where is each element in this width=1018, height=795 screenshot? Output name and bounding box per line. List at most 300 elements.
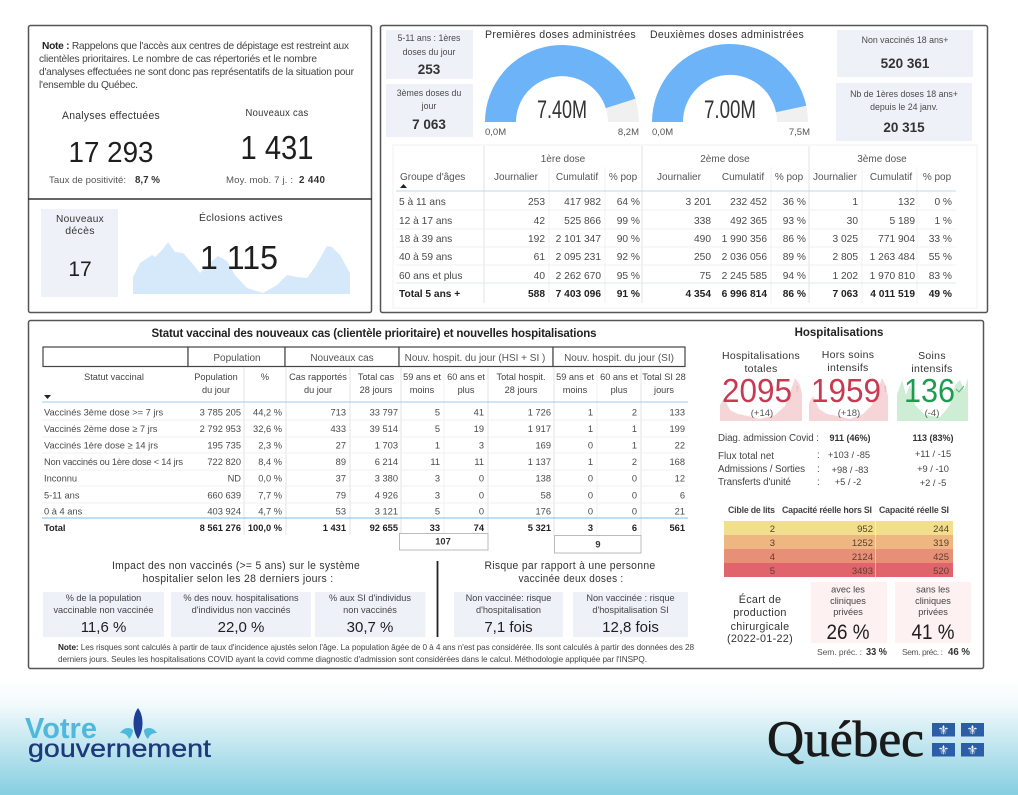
table rows: 338 — [694, 216, 711, 227]
gauge: deuxiemes doses: 7,5M — [789, 127, 810, 138]
table rows: 1 — [852, 197, 858, 208]
kpi: hors soins intensifs: ! — [884, 385, 886, 394]
kpi: hors soins intensifs: 1959 — [811, 372, 881, 409]
kpi: nouveaux deces: décès — [65, 225, 95, 237]
kpi: analyses effectuees — [49, 110, 160, 186]
table rows: 525 866 — [564, 216, 601, 227]
table rows: Inconnu — [44, 474, 77, 484]
footnote — [58, 643, 694, 664]
column headers: Total hospit. — [496, 372, 546, 382]
kpi: 1eres doses depuis 24 janv: depuis le 24 janv. — [870, 102, 938, 112]
gauge: deuxiemes doses: 7.00M — [704, 96, 756, 124]
kpi: avec les cliniques privees: Sem. préc. : — [817, 647, 862, 657]
column headers: Total cas — [358, 372, 395, 382]
column headers: plus — [458, 385, 475, 395]
table rows: 1 — [632, 424, 637, 434]
table rows: 490 — [694, 234, 711, 245]
logo: votre gouvernement — [25, 708, 211, 763]
table rows: 36 % — [783, 197, 806, 208]
table rows: 61 — [534, 252, 545, 263]
table rows: 253 — [528, 197, 545, 208]
kpi: sans les cliniques privees: 46 % — [948, 647, 970, 658]
logo: votre gouvernement: gouvernement — [28, 735, 211, 763]
table rows: 722 820 — [207, 457, 241, 467]
table rows: 192 — [528, 234, 545, 245]
hospital flow details: 911 (46%) — [829, 433, 871, 443]
gauge: premieres doses: 0,0M — [485, 127, 506, 138]
table rows: 32,6 % — [253, 424, 282, 434]
hospital flow details: : — [817, 464, 820, 475]
hospital flow details: +2 / -5 — [920, 478, 946, 488]
kpi: soins intensifs — [897, 350, 968, 421]
kpi: hors soins intensifs — [809, 349, 888, 421]
note text: clientèles prioritaires. Le nombre de cas répertoriés et le nombre — [39, 54, 317, 65]
table group headers — [43, 347, 685, 366]
table rows: 1 — [588, 457, 593, 467]
kpi: 5-11 ans: 253 — [418, 62, 441, 77]
gauge: premieres doses: 7.40M — [537, 96, 587, 124]
kpi: analyses effectuees: 17 293 — [68, 137, 154, 169]
heading: ecart de production chirurgicale — [727, 593, 793, 645]
kpi: population non vaccinee — [43, 592, 164, 637]
section: impact des non vaccines: hospitalier selon les 28 derniers jours : — [142, 573, 334, 585]
table rows: 1 202 — [832, 271, 858, 282]
table rows: 403 924 — [207, 506, 241, 516]
table rows: 2 792 953 — [200, 424, 241, 434]
hospital flow details: +5 / -2 — [835, 477, 861, 487]
hospital flow details: Flux total net — [718, 451, 774, 462]
table: bed capacity: Cible de lits — [728, 505, 775, 515]
hospital flow details: : — [817, 477, 820, 488]
table rows: 22 — [675, 440, 685, 450]
column headers: 59 ans et — [403, 372, 441, 382]
table rows: 2,3 % — [258, 440, 282, 450]
table rows: 42 — [534, 216, 545, 227]
table rows: 91 % — [617, 289, 640, 300]
table header: Journalier — [813, 172, 858, 183]
column headers: Cas rapportés — [289, 372, 347, 382]
table rows — [44, 408, 685, 533]
table rows: 5 189 — [890, 216, 915, 227]
table rows: 6 996 814 — [722, 289, 767, 300]
table rows: 0 — [479, 506, 484, 516]
column headers: % — [261, 372, 269, 382]
kpi: population non vaccinee: 11,6 % — [81, 619, 126, 636]
column headers: du jour — [304, 385, 332, 395]
table rows: 58 — [541, 490, 551, 500]
kpi: soins intensifs: (-4) — [925, 408, 939, 419]
heading: statut vaccinal: Statut vaccinal des nouveaux cas (clientèle prioritaire) et nouvelles hospitalisations — [152, 328, 596, 340]
table header: Journalier — [494, 172, 539, 183]
table rows: 1 431 — [323, 523, 346, 533]
table header: 2ème dose — [700, 154, 750, 165]
kpi: avec les cliniques privees: cliniques — [830, 596, 866, 606]
kpi: nouveaux deces: 17 — [68, 258, 92, 281]
gauge: premieres doses: 8,2M — [618, 127, 639, 138]
kpi: population non vaccinee: vaccinable non vaccinée — [53, 605, 154, 615]
table group headers: Nouv. hospit. du jour (HSI + SI ) — [405, 353, 545, 364]
icon: quebec flag: ⚜ — [967, 744, 978, 758]
table header: Cumulatif — [556, 172, 598, 183]
table rows: ND — [228, 474, 241, 484]
table: bed capacity: 2124 — [852, 552, 873, 563]
table header: % pop — [923, 172, 952, 183]
icon: quebec flag: ⚜ — [938, 744, 949, 758]
table rows: 4 354 — [686, 289, 711, 300]
table group headers: Population — [213, 353, 261, 364]
kpi: hors soins intensifs: Hors soins — [822, 349, 874, 361]
table rows: 1 — [588, 424, 593, 434]
table rows: 7 403 096 — [556, 289, 601, 300]
table rows: 11 — [430, 457, 440, 467]
table rows: 6 214 — [375, 457, 398, 467]
column headers: Population — [194, 372, 238, 382]
kpi: eclosions actives — [133, 211, 350, 294]
table rows: 8 561 276 — [200, 523, 241, 533]
kpi: hospitalisations non vaccines — [171, 592, 311, 637]
table rows: 588 — [528, 289, 545, 300]
kpi: 1eres doses depuis 24 janv: 20 315 — [883, 120, 925, 135]
table: doses by age group — [393, 145, 977, 308]
table rows: Total 5 ans + — [399, 289, 460, 300]
kpi: soins intensifs: intensifs — [911, 363, 953, 375]
table rows: 12 à 17 ans — [399, 216, 452, 227]
table rows: 89 — [336, 457, 346, 467]
section: risque — [454, 560, 688, 637]
hospital flow details: +103 / -85 — [828, 450, 870, 460]
table rows: Vaccinés 2ème dose ≥ 7 jrs — [44, 424, 158, 434]
footer background — [0, 680, 1018, 795]
kpi: hors soins intensifs: intensifs — [827, 362, 869, 374]
kpi: hospitalisations totales: totales — [744, 363, 778, 375]
kpi: nouveaux cas: 1 431 — [240, 129, 314, 166]
kpi: hors soins intensifs: (+18) — [838, 408, 860, 419]
footnote: derniers jours. Seules les hospitalisations COVID ayant la covid comme diagnostic d'admission sont considérées dans le calcul. Méthodologie appliquée par l'INSPQ. — [58, 655, 647, 664]
table rows: 7 063 — [832, 289, 858, 300]
table: bed capacity: Capacité réelle SI — [879, 505, 949, 515]
table header: 1ère dose — [541, 154, 586, 165]
kpi: analyses effectuees: 8,7 % — [135, 175, 160, 186]
kpi: eclosions actives: 1 115 — [200, 239, 278, 276]
panel: tests and cases — [28, 26, 372, 312]
kpi: risque hospitalisation: Non vaccinée: risque — [466, 593, 551, 603]
table rows: 33 — [430, 523, 440, 533]
table rows: 250 — [694, 252, 711, 263]
table rows: 11 — [474, 457, 484, 467]
kpi: risque SI: d'hospitalisation SI — [592, 605, 669, 615]
table rows: 5-11 ans — [44, 490, 80, 500]
table header: % pop — [609, 172, 638, 183]
table rows: 5 à 11 ans — [399, 197, 446, 208]
table rows: 3 — [479, 440, 484, 450]
table rows: 3 121 — [375, 506, 398, 516]
kpi: nouveaux cas — [226, 107, 326, 186]
kpi: 5-11 ans: 5-11 ans : 1ères — [398, 33, 461, 43]
column headers: Total SI 28 — [642, 372, 686, 382]
table rows: 2 095 231 — [556, 252, 601, 263]
heading: ecart de production chirurgicale: chirurgicale — [731, 621, 789, 633]
table rows: 4 011 519 — [870, 289, 915, 300]
table rows: 5 — [435, 408, 440, 418]
table rows: 2 262 670 — [556, 271, 601, 282]
table rows: 3 — [588, 523, 593, 533]
column headers: 60 ans et — [447, 372, 485, 382]
subtotal box: 9: 9 — [595, 540, 601, 550]
kpi: risque SI: Non vaccinée : risque — [586, 593, 675, 603]
table rows: 8,4 % — [258, 457, 282, 467]
table: bed capacity: 952 — [857, 524, 873, 535]
note text: l'ensemble du Québec. — [39, 80, 138, 91]
kpi: avec les cliniques privees — [811, 582, 887, 658]
table rows: 4 926 — [375, 490, 398, 500]
section: risque: Risque par rapport à une personne — [484, 560, 656, 572]
table rows: 0 — [588, 440, 593, 450]
kpi: avec les cliniques privees: 26 % — [826, 621, 870, 644]
table rows: 0 % — [934, 197, 952, 208]
table rows: 44,2 % — [253, 408, 282, 418]
table rows: 1 — [632, 440, 637, 450]
section: hospitalisations: Hospitalisations — [795, 327, 883, 339]
table rows: 5 — [435, 506, 440, 516]
note text — [39, 41, 355, 91]
table rows: 1 970 810 — [870, 271, 915, 282]
kpi: avec les cliniques privees: 33 % — [866, 647, 887, 658]
table rows: 3 — [435, 474, 440, 484]
icon: quebec flag — [932, 723, 984, 758]
table rows: 2 805 — [832, 252, 858, 263]
table rows: 2 245 585 — [722, 271, 767, 282]
table rows: 1 990 356 — [722, 234, 767, 245]
kpi: hospitalisations totales: (+14) — [751, 408, 773, 419]
table rows: 0 à 4 ans — [44, 506, 83, 516]
kpi: risque SI: 12,8 fois — [602, 619, 659, 636]
kpi: SI non vaccines: 30,7 % — [347, 619, 393, 636]
table rows: 168 — [669, 457, 685, 467]
table rows: 2 036 056 — [722, 252, 767, 263]
table header: 3ème dose — [857, 154, 907, 165]
table rows: 169 — [535, 440, 551, 450]
hospital flow details: +98 / -83 — [832, 465, 868, 475]
section: impact des non vaccines: Impact des non vaccinés (>= 5 ans) sur le système — [112, 560, 360, 572]
table rows: 33 % — [929, 234, 952, 245]
kpi: sans les cliniques privees: 41 % — [912, 621, 954, 644]
table rows: 1 — [435, 440, 440, 450]
section: risque: vaccinée deux doses : — [518, 573, 624, 585]
kpi: sans les cliniques privees — [895, 582, 971, 658]
kpi: 3emes doses: jour — [421, 101, 436, 111]
kpi: risque hospitalisation — [454, 592, 563, 637]
kpi: hospitalisations non vaccines: % des nouv. hospitalisations — [183, 593, 299, 603]
kpi: non vaccines 18 ans+: Non vaccinés 18 ans+ — [862, 35, 948, 45]
table rows: 1 263 484 — [870, 252, 915, 263]
kpi: nouveaux cas: Nouveaux cas — [246, 107, 308, 119]
table rows: 49 % — [929, 289, 952, 300]
table rows — [399, 197, 952, 300]
kpi: risque hospitalisation: 7,1 fois — [484, 619, 533, 636]
table rows: 3 025 — [832, 234, 858, 245]
table rows: 0 — [632, 474, 637, 484]
kpi: risque hospitalisation: d'hospitalisation — [476, 605, 541, 615]
table rows: 93 % — [783, 216, 806, 227]
column headers: Statut vaccinal — [84, 372, 144, 382]
table rows: 1 703 — [375, 440, 398, 450]
footnote: Note: Les risques sont calculés à partir de taux d'incidence ajustés selon l'âge. La population âgée de 0 à 4 ans n'est pas considérée. Ils sont calculés à partir des données des 28 — [58, 643, 694, 652]
table header: Cumulatif — [722, 172, 764, 183]
table rows: 60 ans et plus — [399, 271, 462, 282]
kpi: risque SI — [573, 592, 688, 637]
column headers: 28 jours — [505, 385, 538, 395]
kpi: non vaccines 18 ans+ — [837, 30, 973, 77]
kpi: non vaccines 18 ans+: 520 361 — [881, 56, 930, 71]
hospital flow details: : — [817, 450, 820, 461]
hospital flow details — [718, 433, 954, 488]
table rows: 55 % — [929, 252, 952, 263]
table rows: 53 — [336, 506, 346, 516]
table rows: 100,0 % — [248, 523, 283, 533]
table rows: 4,7 % — [258, 506, 282, 516]
kpi: SI non vaccines — [315, 592, 426, 637]
table rows: Non vaccinés ou 1ère dose < 14 jrs — [44, 457, 183, 467]
kpi: 5-11 ans — [386, 30, 473, 79]
column headers: jours — [653, 385, 674, 395]
kpi: sans les cliniques privees: privées — [918, 607, 948, 617]
table: bed capacity: 4 — [770, 552, 775, 563]
table rows: 133 — [669, 408, 685, 418]
table rows: 6 — [632, 523, 637, 533]
table: bed capacity: Capacité réelle hors SI — [782, 505, 872, 515]
table rows: 0 — [632, 490, 637, 500]
table rows: 19 — [474, 424, 484, 434]
table: vaccination status — [42, 347, 688, 553]
table: bed capacity: 425 — [933, 552, 949, 563]
table: bed capacity: 1252 — [852, 538, 873, 549]
column headers: moins — [410, 385, 435, 395]
table rows: 30 — [847, 216, 858, 227]
column headers: 59 ans et — [556, 372, 594, 382]
table rows: 95 % — [617, 271, 640, 282]
table rows: 0,0 % — [258, 474, 282, 484]
logo: quebec: Québec — [767, 712, 924, 768]
table rows: 90 % — [617, 234, 640, 245]
table rows: 660 639 — [207, 490, 241, 500]
kpi: hospitalisations totales: 2095 — [722, 372, 792, 409]
sort arrow — [400, 184, 407, 188]
kpi: hospitalisations totales — [720, 350, 802, 421]
table rows: 417 982 — [564, 197, 601, 208]
column headers: 60 ans et — [600, 372, 638, 382]
subtotal box: 107 — [400, 534, 488, 550]
table rows: 6 — [680, 490, 685, 500]
table rows: 99 % — [617, 216, 640, 227]
hospital flow details: Admissions / Sorties — [718, 464, 805, 475]
logo: votre gouvernement: Votre — [25, 713, 97, 745]
panel: vaccination status and hospitalisations — [28, 320, 984, 668]
column headers: du jour — [202, 385, 230, 395]
table rows: 3 380 — [375, 474, 398, 484]
table rows: 176 — [535, 506, 551, 516]
table rows: 18 à 39 ans — [399, 234, 452, 245]
table rows: 92 655 — [370, 523, 398, 533]
table rows: 2 — [632, 457, 637, 467]
table header: Cumulatif — [870, 172, 912, 183]
table rows: 561 — [669, 523, 685, 533]
table rows: 33 797 — [370, 408, 398, 418]
note text: Note : Rappelons que l'accès aux centres de dépistage est restreint aux — [42, 41, 349, 52]
table header: Groupe d'âges — [400, 172, 465, 183]
table rows: 83 % — [929, 271, 952, 282]
table rows: 195 735 — [207, 440, 241, 450]
table rows: 0 — [588, 490, 593, 500]
kpi: avec les cliniques privees: privées — [833, 607, 863, 617]
kpi: eclosions actives: Éclosions actives — [199, 211, 283, 224]
table rows: 199 — [669, 424, 685, 434]
kpi: hospitalisations totales: ! — [796, 385, 798, 394]
gauge: premieres doses: Premières doses administrées — [485, 29, 636, 41]
table: bed capacity: 3493 — [852, 566, 873, 577]
table rows: 132 — [898, 197, 915, 208]
table rows: 771 904 — [878, 234, 915, 245]
kpi: hospitalisations non vaccines: 22,0 % — [218, 619, 264, 636]
column headers: 28 jours — [360, 385, 393, 395]
table rows: 27 — [336, 440, 346, 450]
column headers: moins — [563, 385, 588, 395]
gauge: deuxiemes doses — [650, 29, 810, 138]
table rows: 7,7 % — [258, 490, 282, 500]
table rows: 75 — [700, 271, 711, 282]
table rows: 86 % — [783, 289, 806, 300]
kpi: nouveaux deces — [41, 209, 118, 297]
area sparkline: eclosions — [133, 242, 350, 294]
icon: quebec flag: ⚜ — [967, 724, 978, 738]
table rows: 21 — [675, 506, 685, 516]
table rows: 232 452 — [730, 197, 767, 208]
table rows: 86 % — [783, 234, 806, 245]
kpi: soins intensifs: Soins — [918, 350, 946, 362]
table rows: 74 — [474, 523, 485, 533]
table rows: 12 — [675, 474, 685, 484]
kpi: nouveaux deces: Nouveaux — [56, 213, 104, 225]
table: bed capacity: 5 — [770, 566, 775, 577]
section: impact des non vaccines — [43, 560, 426, 637]
kpi: population non vaccinee: % de la population — [66, 593, 141, 603]
table group headers: Nouveaux cas — [310, 353, 374, 364]
kpi: sans les cliniques privees: sans les — [916, 584, 950, 594]
table rows: 79 — [336, 490, 346, 500]
icon: fleur-de-lis — [120, 708, 157, 739]
kpi: avec les cliniques privees: avec les — [831, 584, 865, 594]
table header — [400, 154, 952, 183]
sort arrow — [44, 395, 51, 399]
table: bed capacity: 2 — [770, 524, 775, 535]
table rows: 1 — [588, 408, 593, 418]
table rows: 0 — [632, 506, 637, 516]
kpi: analyses effectuees: Taux de positivité: — [49, 175, 126, 186]
kpi: 1eres doses depuis 24 janv: Nb de 1ères doses 18 ans+ — [850, 89, 958, 99]
table rows: 5 321 — [528, 523, 551, 533]
table rows: 89 % — [783, 252, 806, 263]
kpi: nouveaux cas: 2 440 — [299, 175, 326, 186]
table group headers: Nouv. hospit. du jour (SI) — [564, 353, 674, 364]
table rows: 3 — [435, 490, 440, 500]
kpi: 3emes doses: 3èmes doses du — [397, 88, 461, 98]
kpi: 1eres doses depuis 24 janv — [836, 83, 972, 141]
kpi: SI non vaccines: % aux SI d'individus — [329, 593, 411, 603]
hospital flow details: 113 (83%) — [912, 433, 954, 443]
table rows: 40 — [534, 271, 545, 282]
table rows: 0 — [479, 490, 484, 500]
gauge: premieres doses — [485, 29, 639, 138]
column headers: plus — [611, 385, 628, 395]
